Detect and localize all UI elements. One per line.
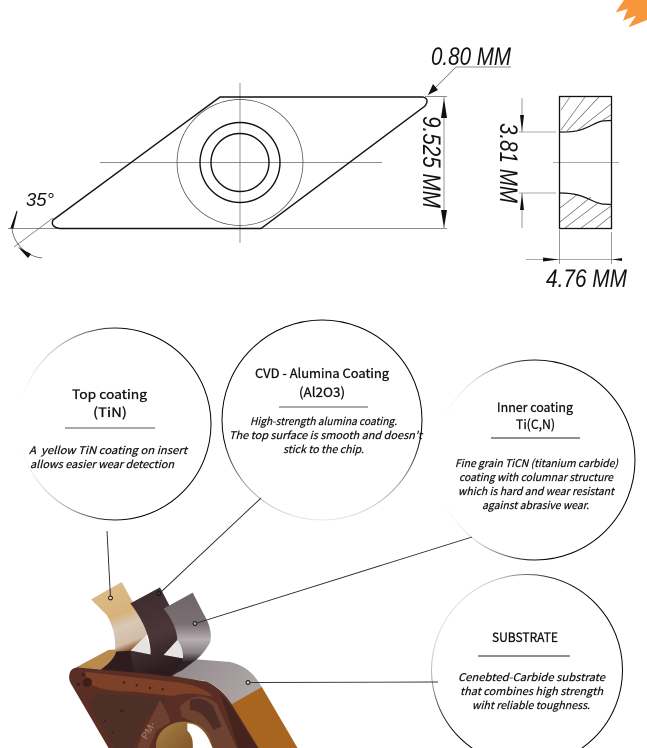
text: substrate description: Cenebted-Carbide substrate bbox=[458, 670, 606, 685]
orange side bbox=[232, 687, 298, 748]
PM marking: PM- bbox=[140, 720, 158, 741]
callout: inner coating: Ti(C,N) bbox=[516, 414, 555, 433]
leader: substrate bbox=[246, 681, 438, 684]
raised ridge bbox=[85, 672, 213, 697]
heading: substrate: SUBSTRATE bbox=[492, 627, 558, 646]
callout: inner coating bbox=[435, 360, 635, 560]
technical drawing: insert top view bbox=[8, 43, 511, 258]
text: top coating description: A yellow TiN coating on insert bbox=[29, 443, 189, 458]
leader: alumina coating bbox=[157, 498, 261, 595]
text: alumina description bbox=[229, 414, 424, 457]
heading: top coating: Top coating bbox=[72, 384, 148, 403]
callout: CVD alumina coating bbox=[222, 320, 424, 520]
leader: top coating bbox=[107, 531, 112, 600]
heading: inner coating: Inner coating bbox=[497, 397, 574, 416]
label: 35 degrees: 35° bbox=[26, 190, 54, 210]
label: 4.76 MM: 4.76 MM bbox=[546, 265, 627, 293]
centre hole bbox=[156, 722, 212, 748]
callout: CVD alumina coating: (Al2O3) bbox=[299, 382, 345, 401]
text: inner coating description: against abrasive wear. bbox=[482, 498, 589, 513]
dark band bbox=[100, 649, 197, 677]
corner screw marks bbox=[83, 678, 92, 687]
callout: substrate bbox=[432, 574, 622, 748]
PM wing bbox=[137, 700, 170, 748]
text: substrate description bbox=[458, 670, 606, 713]
text: top coating description bbox=[29, 443, 189, 472]
text: alumina description: The top surface is smooth and doesn't bbox=[229, 428, 424, 443]
TiN yellow layer bbox=[91, 582, 148, 652]
text: top coating description: allows easier wear detection bbox=[30, 457, 175, 472]
hole surround bbox=[180, 697, 237, 748]
text: inner coating description: coating with columnar structure bbox=[459, 470, 614, 485]
text: substrate description: wiht reliable toughness. bbox=[472, 698, 590, 713]
text: inner coating description: which is hard and wear resistant bbox=[458, 484, 616, 499]
icon: orange corner flame bbox=[616, 0, 647, 27]
alumina dark layer bbox=[130, 587, 183, 677]
text: alumina description: stick to the chip. bbox=[283, 442, 364, 457]
technical drawing: insert section view bbox=[494, 96, 627, 293]
brown face bbox=[69, 667, 259, 748]
leader: inner coating bbox=[193, 537, 472, 625]
callout: top coating: (TiN) bbox=[93, 402, 127, 421]
label: 3.81 MM: 3.81 MM bbox=[494, 123, 522, 203]
text: substrate description: that combines high strength bbox=[460, 684, 604, 699]
inner grey layer bbox=[164, 593, 211, 677]
heading: CVD alumina coating: CVD - Alumina Coating bbox=[255, 363, 390, 382]
grey top surface bbox=[167, 659, 262, 704]
text: inner coating description: Fine grain TiCN (titanium carbide) bbox=[455, 456, 618, 471]
text: inner coating description bbox=[455, 456, 618, 513]
callout: top coating bbox=[19, 328, 211, 520]
gold left edge bbox=[76, 649, 117, 669]
recessed panel bbox=[87, 693, 170, 748]
label: 9.525 MM: 9.525 MM bbox=[417, 116, 445, 208]
label: 0.80 MM: 0.80 MM bbox=[431, 43, 511, 71]
illustration: coated carbide insert with peeled layers bbox=[69, 582, 298, 748]
text: alumina description: High-strength alumina coating. bbox=[250, 414, 397, 429]
